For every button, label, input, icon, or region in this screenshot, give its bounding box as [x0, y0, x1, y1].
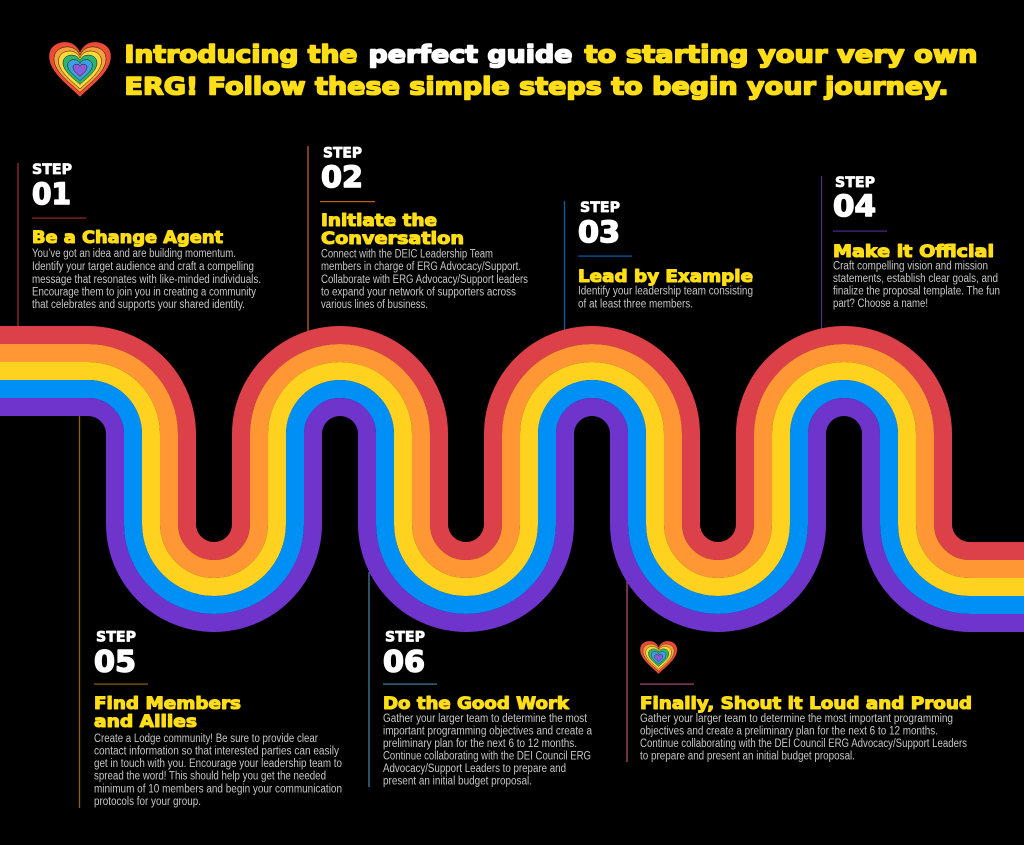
panel: final step	[640, 641, 972, 762]
panel: step 01: You’ve got an idea and are building momentum.	[32, 248, 236, 260]
panel: step 06: Do the Good Work	[383, 694, 570, 713]
title: Introducing the	[124, 40, 358, 68]
panel: step 05: minimum of 10 members and begin your communication	[94, 784, 342, 796]
panel: step 04: part? Choose a name!	[833, 298, 928, 310]
panel: step 06: 06	[383, 644, 425, 678]
panel: step 01: that celebrates and supports your shared identity.	[32, 299, 245, 311]
panel: step 03: Lead by Example	[578, 267, 753, 286]
title: to starting your very own	[584, 40, 978, 68]
panel: step 02: Connect with the DEIC Leadership Team	[321, 248, 493, 260]
panel: step 06: STEP	[385, 630, 425, 646]
panel: final step: Gather your larger team to determine the most important programming	[640, 713, 953, 725]
panel: step 05: contact information so that interested parties can easily	[94, 746, 339, 758]
panel: step 02: 02	[321, 160, 363, 194]
panel: step 06: Gather your larger team to determine the most	[383, 713, 588, 725]
panel: step 01: 01	[32, 177, 71, 211]
panel: step 04: Make it Official	[833, 242, 994, 261]
panel: step 01: STEP	[32, 162, 72, 178]
panel: step 02: STEP	[323, 146, 362, 162]
panel: step 02	[320, 146, 528, 311]
panel: step 01: message that resonates with like-minded individuals.	[32, 274, 261, 286]
panel: step 05: protocols for your group.	[94, 796, 201, 808]
panel: step 04: STEP	[835, 175, 875, 191]
panel: step 03	[578, 200, 753, 310]
title: perfect guide	[368, 40, 572, 68]
panel: step 03: of at least three members.	[578, 298, 693, 310]
panel: step 04: Craft compelling vision and mission	[833, 260, 988, 272]
panel: step 05: get in touch with you. Encourage your leadership team to	[94, 758, 342, 770]
panel: step 03: Identify your leadership team consisting	[578, 286, 753, 298]
panel: step 02: Initiate the	[321, 211, 437, 230]
panel: step 02: to expand your network of supporters across	[321, 286, 516, 298]
icon: rainbow heart	[49, 42, 111, 97]
panel: step 06: present an initial budget proposal.	[383, 776, 532, 788]
panel: step 06: important programming objectives and create a	[383, 726, 593, 738]
panel: step 06	[383, 630, 593, 788]
panel: step 01: Encourage them to join you in creating a community	[32, 286, 256, 298]
panel: step 04: 04	[833, 189, 876, 223]
title: ERG! Follow these simple steps to begin your journey.	[124, 72, 948, 100]
panel: step 01	[32, 162, 261, 311]
panel: final step: Continue collaborating with the DEI Council ERG Advocacy/Support Leaders	[640, 738, 967, 750]
icon: small rainbow heart	[640, 641, 677, 674]
panel: step 06: preliminary plan for the next 6 to 12 months.	[383, 738, 577, 750]
panel: step 02: various lines of business.	[321, 299, 428, 311]
panel: step 05: Create a Lodge community! Be sure to provide clear	[94, 733, 318, 745]
panel: step 04: finalize the proposal template. The fun	[833, 286, 1000, 298]
panel: step 02: Collaborate with ERG Advocacy/Support leaders	[321, 274, 528, 286]
panel: step 02: members in charge of ERG Advocacy/Support.	[321, 261, 521, 273]
panel: step 03: STEP	[580, 200, 620, 216]
leader lines connecting steps to the rainbow	[18, 146, 822, 808]
panel: step 03: 03	[578, 215, 620, 249]
panel: step 05: and Allies	[94, 712, 197, 731]
panel: step 04: statements, establish clear goals, and	[833, 273, 998, 285]
panel: step 05: 05	[94, 644, 136, 678]
panel: step 05	[94, 630, 342, 808]
panel: final step: to prepare and present an initial budget proposal.	[640, 750, 855, 762]
panel: step 06: Continue collaborating with the DEI Council ERG	[383, 750, 591, 762]
title	[124, 40, 978, 100]
panel: final step: objectives and create a preliminary plan for the next 6 to 12 months.	[640, 726, 938, 738]
panel: step 01: Be a Change Agent	[32, 228, 223, 247]
panel: step 02: Conversation	[321, 229, 464, 248]
panel: step 05: Find Members	[94, 694, 241, 713]
panel: step 01: Identify your target audience and craft a compelling	[32, 261, 254, 273]
panel: step 04	[833, 175, 1000, 310]
panel: step 05: spread the word! This should help you get the needed	[94, 770, 326, 782]
panel: step 05: STEP	[96, 630, 136, 646]
panel: final step: Finally, Shout it Loud and Proud	[640, 694, 972, 713]
panel: step 06: Advocacy/Support Leaders to prepare and	[383, 763, 566, 775]
rainbow road	[0, 335, 1024, 623]
